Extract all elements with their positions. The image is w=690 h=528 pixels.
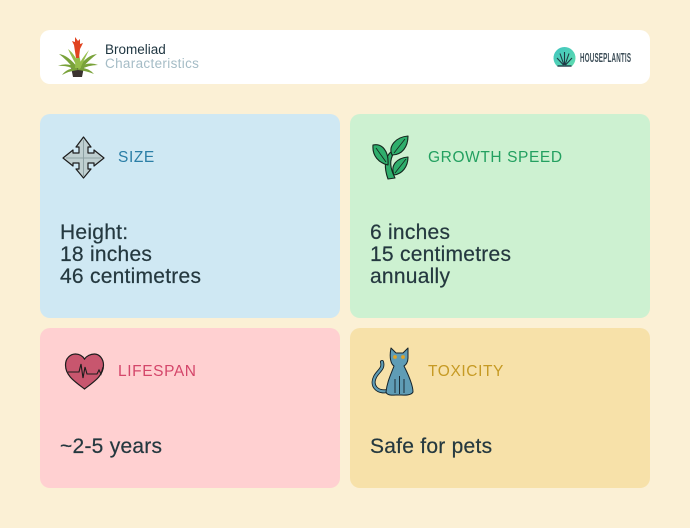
icon: four-way arrows xyxy=(62,136,105,179)
icon: heart with pulse xyxy=(64,353,104,390)
text: toxicity value: Safe for pets xyxy=(370,435,492,458)
heading: growth speed: GROWTH SPEED xyxy=(428,149,563,166)
text: growth values: annually xyxy=(370,265,450,288)
header bar xyxy=(40,30,650,84)
text: growth values: 15 centimetres xyxy=(370,243,511,266)
text: lifespan value: ~2-5 years xyxy=(60,435,162,458)
panel: growth speed xyxy=(350,114,650,318)
text: height values: Height: xyxy=(60,221,128,244)
title: Bromeliad: Bromeliad xyxy=(105,42,166,57)
heading: size: SIZE xyxy=(118,149,155,166)
icon: leaves xyxy=(372,136,409,180)
heading: toxicity: TOXICITY xyxy=(428,363,504,380)
text: growth values: 6 inches xyxy=(370,221,450,244)
heading: lifespan: LIFESPAN xyxy=(118,363,197,380)
subtitle: Characteristics: Characteristics xyxy=(105,56,199,71)
icon: cat xyxy=(372,348,414,396)
text: height values xyxy=(60,221,201,288)
text: growth values xyxy=(370,221,511,288)
text: height values: 18 inches xyxy=(60,243,152,266)
logo: Houseplantis xyxy=(554,47,631,67)
icon: logo circle xyxy=(554,47,576,67)
logo wordmark: HOUSEPLANTIS xyxy=(580,50,631,65)
icon: bromeliad plant xyxy=(58,37,98,77)
panel: toxicity xyxy=(350,328,650,488)
text: height values: 46 centimetres xyxy=(60,265,201,288)
panel: size xyxy=(40,114,340,318)
panel: lifespan xyxy=(40,328,340,488)
